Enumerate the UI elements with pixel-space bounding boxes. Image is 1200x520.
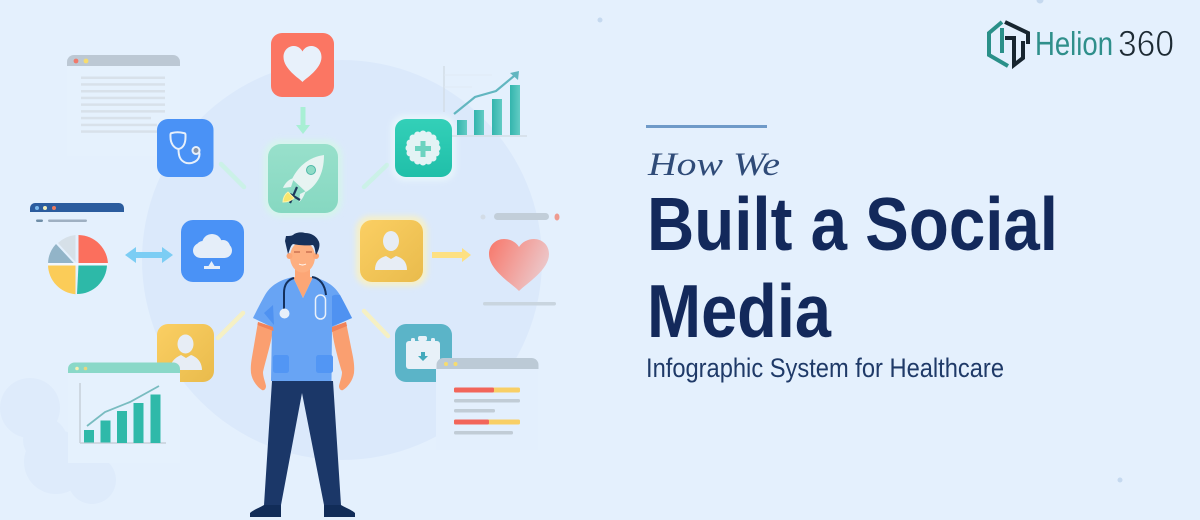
logo: Helion 360: 360 bbox=[1118, 23, 1174, 64]
connector: plus to rocket bbox=[364, 165, 387, 187]
icon: heart tile bbox=[271, 33, 334, 97]
window: bottom left chart bbox=[68, 362, 180, 463]
nurse pants bbox=[264, 381, 341, 505]
window: heart card bbox=[480, 213, 560, 291]
icon: calendar tile bbox=[395, 324, 452, 382]
arrow: user to heart bbox=[432, 248, 471, 262]
icon: user tile right bbox=[356, 216, 427, 286]
pie chart bbox=[48, 235, 108, 294]
logo: Helion 360 bbox=[989, 22, 1174, 66]
icon: large heart bbox=[489, 239, 549, 291]
subtitle: Infographic System: Infographic System for Healthcare bbox=[646, 353, 1004, 383]
background circle bbox=[142, 60, 542, 460]
nurse shoes bbox=[250, 505, 281, 517]
heart card rule bbox=[483, 302, 556, 306]
title line 2: Media bbox=[647, 269, 832, 353]
icon: rocket tile bbox=[264, 140, 342, 217]
logo mark bbox=[989, 22, 1028, 66]
title line 1: Built a Social bbox=[647, 182, 1058, 266]
window: pie chart bbox=[30, 203, 124, 294]
title rule bbox=[646, 125, 767, 128]
window: text document bbox=[67, 55, 180, 156]
nurse hair bbox=[285, 232, 319, 255]
window: report bbox=[436, 358, 538, 450]
nurse arms bbox=[251, 322, 273, 390]
chart: top right bars and trend bbox=[444, 66, 527, 136]
icon: plus badge tile bbox=[391, 115, 456, 181]
nurse figure bbox=[250, 232, 355, 517]
subtitle: How We: How We bbox=[647, 147, 780, 183]
arrow: heart to rocket bbox=[296, 107, 310, 134]
arrow: double pie-cloud bbox=[125, 247, 173, 263]
connector: user to nurse bbox=[218, 313, 243, 338]
icon: user tile left bbox=[157, 324, 214, 382]
icon: cloud tile bbox=[181, 220, 244, 282]
icon: stethoscope tile bbox=[157, 119, 214, 177]
nurse shirt bbox=[253, 277, 352, 381]
connector: calendar to nurse bbox=[364, 311, 388, 336]
logo text: Helion bbox=[1035, 25, 1113, 62]
connector: stethoscope to rocket bbox=[221, 164, 244, 187]
nurse neck and face bbox=[293, 266, 313, 298]
nurse stethoscope bbox=[284, 277, 326, 313]
